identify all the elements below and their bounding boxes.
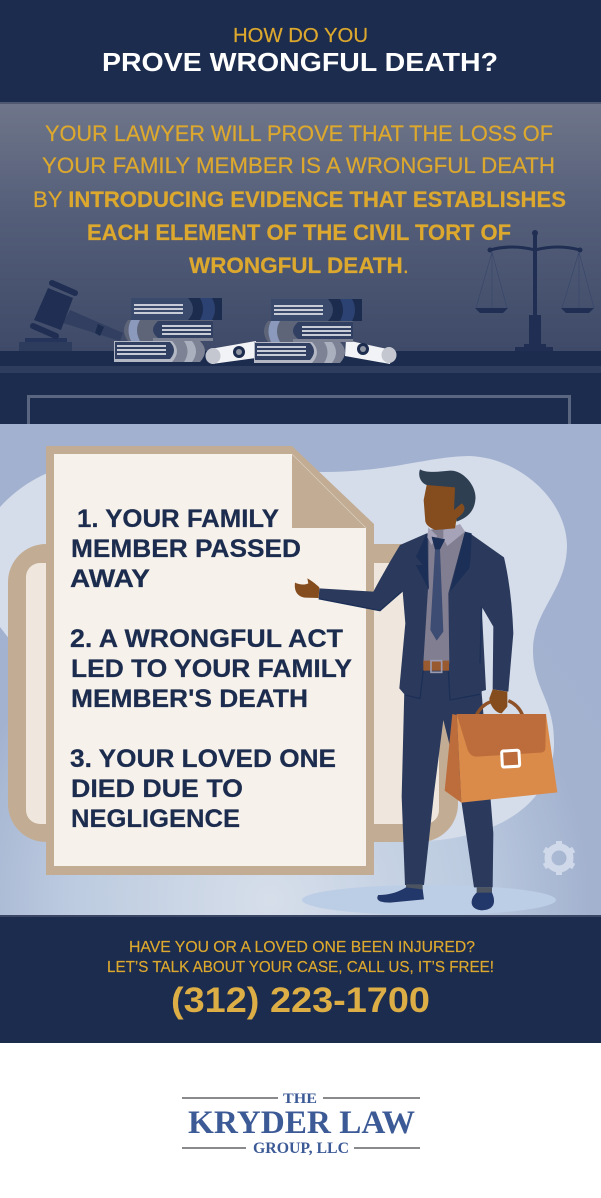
tie xyxy=(430,537,445,641)
document sheet xyxy=(46,446,374,875)
list of three elements: MEMBER'S DEATH xyxy=(71,685,308,713)
lapels xyxy=(416,532,472,592)
icon: scroll right xyxy=(345,340,396,364)
intro paragraph: WRONGFUL DEATH. xyxy=(189,253,409,278)
briefcase xyxy=(445,714,557,803)
logo: the kryder law group: THE xyxy=(283,1091,317,1107)
icon: book stack right xyxy=(254,299,362,363)
clipboard xyxy=(8,446,458,875)
clipboard handles xyxy=(8,544,458,842)
right collar xyxy=(443,524,465,546)
background blob xyxy=(0,456,567,841)
shirt xyxy=(423,525,465,663)
intro paragraph: YOUR FAMILY MEMBER IS A WRONGFUL DEATH xyxy=(42,153,555,178)
list of three elements: MEMBER PASSED xyxy=(71,535,301,563)
icon: book stack left xyxy=(114,298,222,362)
icon: scales of justice xyxy=(475,230,594,352)
list of three elements: AWAY xyxy=(70,565,150,593)
trousers xyxy=(402,663,493,887)
call to action text: HAVE YOU OR A LOVED ONE BEEN INJURED? xyxy=(129,939,475,956)
panel: elements of wrongful death xyxy=(0,424,601,916)
footer call to action: LET’S TALK ABOUT YOUR CASE, CALL US, IT’S FREE! xyxy=(107,959,494,976)
logo: the kryder law group: KRYDER LAW xyxy=(188,1105,415,1141)
gripping hand xyxy=(489,689,507,713)
logo: the kryder law group xyxy=(182,1091,420,1157)
intro paragraph: EACH ELEMENT OF THE CIVIL TORT OF xyxy=(87,220,511,245)
panel: courtroom xyxy=(0,102,601,426)
list of three elements xyxy=(70,505,352,833)
footer call to action xyxy=(0,915,601,1043)
intro paragraph xyxy=(33,121,566,278)
desk xyxy=(0,351,601,426)
title: prove wrongful death: PROVE WRONGFUL DEATH? xyxy=(102,47,498,77)
socks and shoes xyxy=(377,884,494,910)
icon: gear xyxy=(544,841,574,875)
intro paragraph: YOUR LAWYER WILL PROVE THAT THE LOSS OF xyxy=(45,121,553,146)
icon: gavel xyxy=(19,283,123,351)
list of three elements: LED TO YOUR FAMILY xyxy=(71,655,352,683)
pointing hand xyxy=(295,578,319,598)
belt xyxy=(423,661,449,672)
head and neck xyxy=(424,485,464,530)
logo: the kryder law group: GROUP, LLC xyxy=(253,1140,349,1157)
list of three elements: 1. YOUR FAMILY xyxy=(77,505,279,533)
header line: how do you: HOW DO YOU xyxy=(233,25,368,47)
header band xyxy=(0,0,601,102)
left collar xyxy=(427,527,437,545)
list of three elements: 3. YOUR LOVED ONE xyxy=(70,745,336,773)
jacket xyxy=(319,533,513,700)
list of three elements: 2. A WRONGFUL ACT xyxy=(70,625,343,653)
illustration: lawyer with briefcase xyxy=(295,469,557,910)
phone number: (312) 223-1700 xyxy=(171,981,430,1020)
floor shadow xyxy=(302,885,556,915)
hair xyxy=(419,469,476,522)
jacket shadow lines xyxy=(319,592,482,700)
icon: scroll left xyxy=(206,341,256,364)
briefcase handle xyxy=(477,701,522,715)
intro paragraph: BY INTRODUCING EVIDENCE THAT ESTABLISHES xyxy=(33,187,566,212)
list of three elements: NEGLIGENCE xyxy=(71,805,240,833)
list of three elements: DIED DUE TO xyxy=(71,775,243,803)
